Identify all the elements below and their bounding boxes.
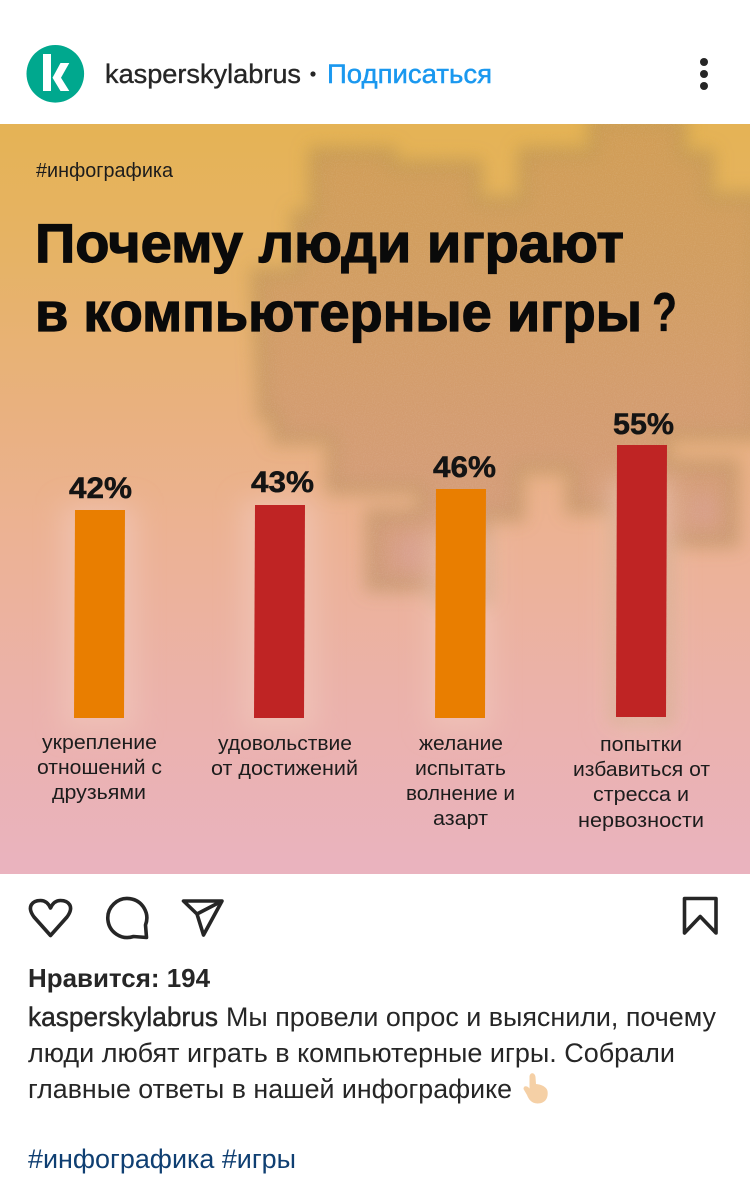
account name: kasperskylabrus — [105, 59, 301, 89]
caption: люди любят играть в компьютерные игры. Собрали — [28, 1038, 675, 1068]
title — [35, 212, 677, 343]
hashtags: #инфографика #игры — [28, 1144, 296, 1174]
label: desire for excitement: волнение и — [406, 783, 515, 805]
pink spots in dark blocks — [398, 496, 714, 567]
label: desire for excitement — [406, 733, 515, 830]
label: desire for excitement: испытать — [415, 758, 506, 780]
icon: bookmark — [684, 898, 716, 933]
icon: send — [184, 901, 222, 935]
title: в компьютерные игры — [35, 281, 642, 343]
likes count: Нравится: 194 — [28, 963, 211, 993]
label: strengthening friendships: друзьями — [52, 782, 146, 804]
icon: kaspersky logo — [26, 45, 84, 103]
bar: 55%: 55% — [613, 408, 674, 441]
bar: 42% — [69, 472, 132, 718]
bar: 46%: 46% — [433, 451, 496, 484]
title: Почему люди играют — [35, 212, 624, 274]
icon: pointing hand emoji — [524, 1073, 548, 1104]
label: stress relief: попытки — [600, 734, 682, 756]
label: desire for excitement: азарт — [433, 808, 488, 830]
subscribe link: Подписаться — [327, 59, 492, 89]
bar: 55% — [613, 408, 674, 717]
blurred pixel-art background — [255, 118, 750, 718]
bar: 43%: 43% — [251, 466, 314, 499]
light glow behind bars — [62, 480, 673, 730]
bar chart — [69, 408, 674, 718]
action icons — [30, 898, 716, 938]
label: stress relief: нервозности — [578, 810, 704, 832]
label: satisfaction from achievements: от достижений — [211, 758, 358, 780]
title: ? — [652, 281, 677, 343]
bar: 43% — [251, 466, 314, 718]
caption: главные ответы в нашей инфографике — [28, 1074, 512, 1104]
label: satisfaction from achievements — [212, 739, 357, 779]
icon: comment — [108, 899, 147, 938]
panel: infographic — [0, 118, 750, 874]
label: strengthening friendships — [38, 738, 162, 803]
bar: 46% — [433, 451, 496, 718]
caption: Мы провели опрос и выяснили, почему — [226, 1002, 716, 1032]
label: strengthening friendships: укрепление — [42, 732, 157, 754]
label: stress relief: стресса и — [593, 784, 689, 806]
icon: heart — [30, 900, 71, 936]
separator dot — [310, 71, 316, 77]
label: desire for excitement: желание — [419, 733, 503, 755]
label: satisfaction from achievements: удовольствие — [218, 733, 352, 755]
heading tag: #инфографика — [36, 160, 174, 182]
label: strengthening friendships: отношений с — [37, 757, 162, 779]
label: stress relief: избавиться от — [573, 759, 710, 781]
bar: 42%: 42% — [69, 472, 132, 505]
header bar — [0, 0, 750, 124]
label: stress relief — [573, 734, 710, 832]
icon: more menu — [700, 58, 708, 90]
caption: kasperskylabrus — [28, 1002, 218, 1032]
caption — [28, 1002, 716, 1104]
